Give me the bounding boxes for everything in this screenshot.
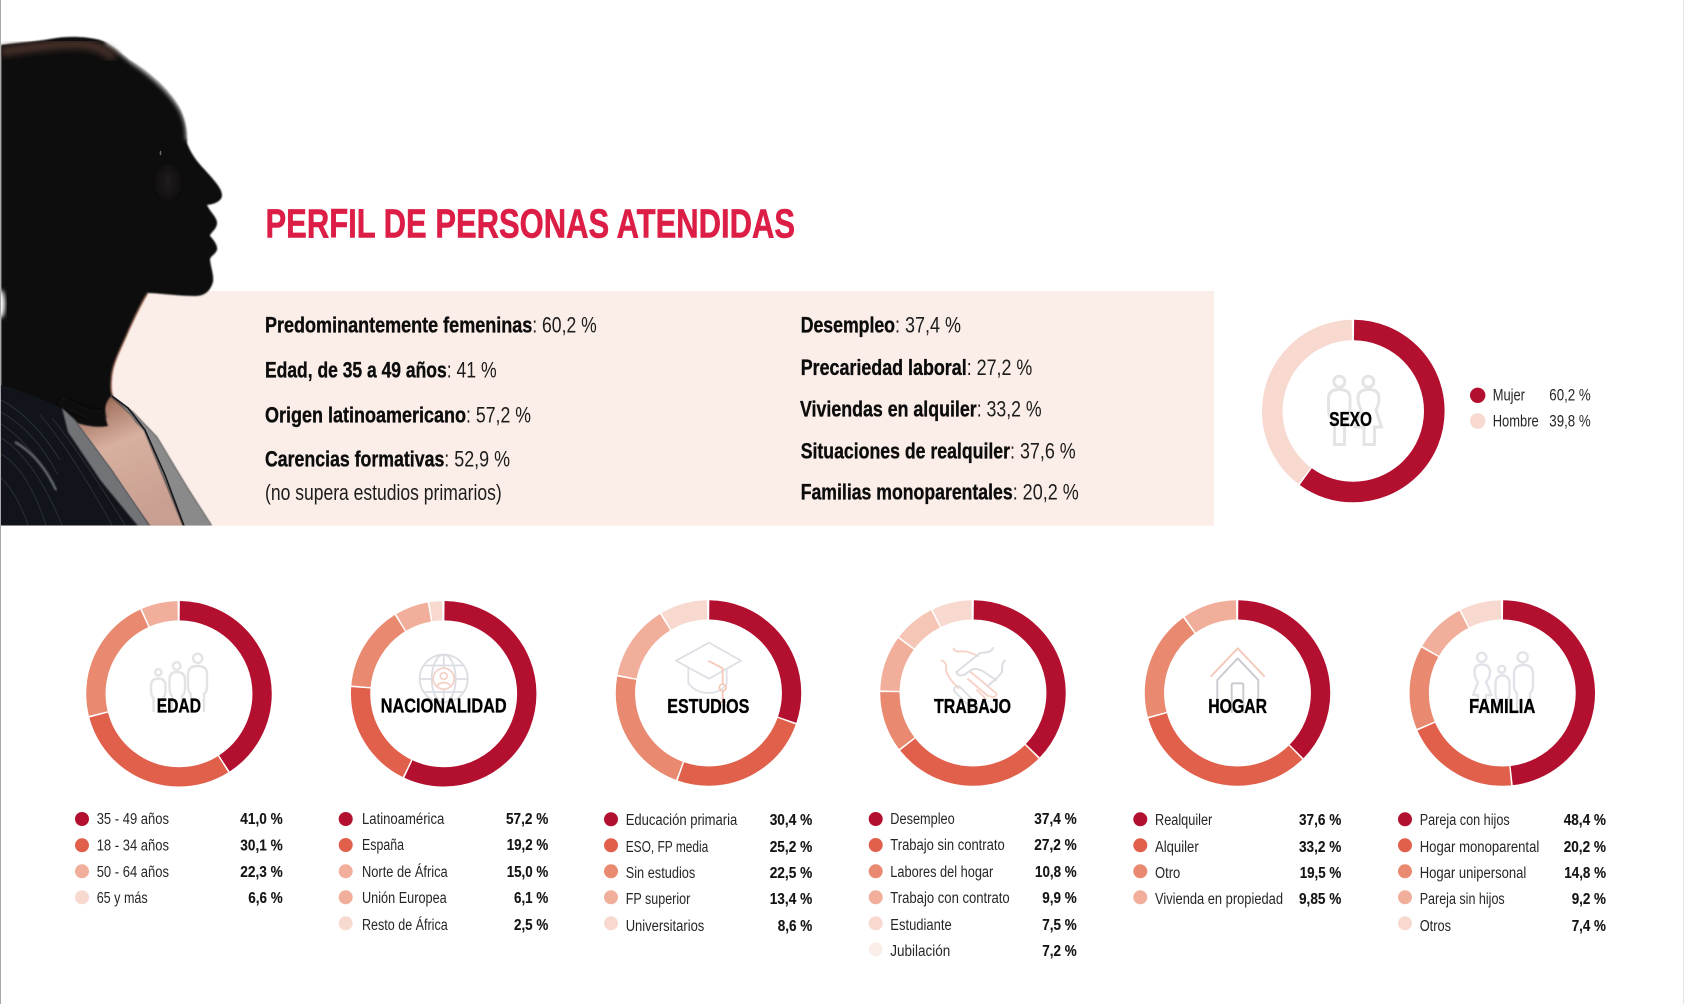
legend: trabajo: Labores del hogar [890, 864, 993, 881]
legend: estudios: 8,6 % [778, 918, 812, 935]
legend: familia: Otros [1420, 918, 1451, 935]
legend: estudios: Sin estudios [626, 865, 695, 882]
summary line: job precarity: Precariedad laboral [801, 355, 967, 380]
legend: trabajo: 10,8 % [1035, 864, 1077, 881]
legend: trabajo: Trabajo sin contrato [890, 837, 1005, 854]
label: hogar: HOGAR [1208, 695, 1267, 718]
label: familia: FAMILIA [1469, 695, 1535, 718]
icon: three people [151, 654, 207, 712]
legend: familia: Pareja sin hijos [1420, 891, 1505, 908]
summary line: sublet situations: Situaciones de realquiler [801, 439, 1010, 464]
legend: trabajo: 7,2 % [1042, 943, 1077, 960]
panel: summary background [1, 291, 1214, 526]
icon: globe with person [420, 655, 468, 703]
legend: estudios: Universitarios [626, 918, 705, 935]
icon: family [1473, 652, 1533, 713]
legend: nacionalidad: 6,1 % [514, 890, 548, 907]
summary line: predominantly female: Predominantemente femeninas [265, 313, 532, 338]
legend: trabajo: 9,9 % [1042, 890, 1077, 907]
icon: handshake [942, 648, 1005, 709]
legend: nacionalidad: Resto de África [362, 917, 448, 934]
legend: estudios: 25,2 % [770, 839, 812, 856]
legend: hogar: Realquiler [1155, 812, 1212, 829]
label: trabajo: TRABAJO [934, 695, 1011, 718]
panel: hogar [1133, 610, 1341, 908]
summary line: education gaps: : 52,9 % [444, 447, 510, 472]
glow behind neck [0, 290, 5, 318]
legend: edad: 35 - 49 años [97, 811, 169, 828]
soft glow over forehead edge [106, 42, 188, 140]
icon: house [1211, 648, 1265, 713]
legend: familia: 9,2 % [1572, 891, 1606, 908]
summary line: unemployment: Desempleo [801, 313, 895, 338]
legend: edad: 41,0 % [240, 811, 283, 828]
legend: familia: Hogar monoparental [1420, 839, 1539, 856]
legend: nacionalidad: 19,2 % [507, 837, 548, 854]
label: sexo: SEXO [1329, 408, 1372, 431]
summary line: age: : 41 % [447, 358, 497, 383]
summary line: predominantly female: : 60,2 % [532, 313, 597, 338]
label: nacionalidad: NACIONALIDAD [381, 695, 507, 718]
legend: hogar: 33,2 % [1299, 839, 1341, 856]
legend: hogar: 37,6 % [1299, 812, 1341, 829]
summary line: rented housing: : 33,2 % [977, 397, 1042, 422]
text block: summary right column [800, 313, 1079, 504]
panel: edad [75, 611, 283, 907]
legend: nacionalidad: Unión Europea [362, 890, 447, 907]
legend: edad: 22,3 % [240, 864, 283, 881]
legend: hogar: 19,5 % [1300, 865, 1341, 882]
legend: familia: 48,4 % [1564, 812, 1606, 829]
summary line: sublet situations: : 37,6 % [1010, 439, 1076, 464]
legend: hogar: 9,85 % [1299, 891, 1341, 908]
donut chart: estudios [625, 610, 792, 776]
legend: estudios: 13,4 % [770, 891, 812, 908]
icon: graduation cap [676, 643, 741, 702]
legend: nacionalidad: España [362, 837, 404, 854]
donut chart: hogar [1154, 610, 1321, 776]
legend: hogar: Alquiler [1155, 839, 1199, 856]
legend: nacionalidad: 15,0 % [507, 864, 548, 881]
panel: nacionalidad [339, 611, 548, 934]
label: estudios: ESTUDIOS [667, 695, 749, 718]
legend: sexo: 60,2 % [1549, 386, 1591, 404]
hair highlight [1, 44, 114, 58]
summary line: age: Edad, de 35 a 49 años [265, 358, 447, 383]
legend: nacionalidad [339, 811, 548, 934]
legend: trabajo: 27,2 % [1034, 837, 1077, 854]
legend: estudios: 30,4 % [770, 812, 812, 829]
legend: hogar: Otro [1155, 865, 1180, 882]
legend: trabajo: Jubilación [890, 943, 950, 960]
legend: trabajo: Desempleo [890, 811, 955, 828]
left lapel [62, 408, 150, 526]
chest skin [74, 396, 183, 526]
summary line: single-parent families: : 20,2 % [1013, 479, 1079, 504]
summary line: education gaps [265, 447, 510, 505]
legend: edad: 65 y más [97, 890, 148, 907]
legend: trabajo: 37,4 % [1034, 811, 1077, 828]
legend: sexo [1470, 386, 1591, 430]
legend: edad: 6,6 % [248, 890, 283, 907]
legend: edad [75, 811, 283, 907]
donut chart: nacionalidad [361, 611, 527, 777]
panel: sexo [1272, 330, 1591, 492]
legend: hogar [1133, 812, 1341, 908]
legend: edad: 50 - 64 años [97, 864, 169, 881]
text block: summary left column [265, 313, 597, 505]
legend: familia: 20,2 % [1564, 839, 1606, 856]
summary line: unemployment: : 37,4 % [895, 313, 961, 338]
summary line: education gaps: Carencias formativas [265, 447, 444, 472]
legend: familia: 14,8 % [1564, 865, 1606, 882]
summary line: origin: Origen latinoamericano [265, 403, 466, 428]
label: edad: EDAD [157, 695, 201, 718]
donut chart: familia [1419, 610, 1585, 776]
legend: trabajo: 7,5 % [1042, 917, 1077, 934]
summary line: rented housing: Viviendas en alquiler [800, 397, 977, 422]
summary line: job precarity: : 27,2 % [967, 355, 1032, 380]
icon: man and woman [1328, 376, 1382, 444]
panel: trabajo [869, 610, 1077, 960]
legend: trabajo: Trabajo con contrato [890, 890, 1010, 907]
eye glint [160, 151, 161, 155]
donut chart: edad [96, 611, 262, 777]
legend: estudios: FP superior [626, 891, 690, 908]
legend: hogar: Vivienda en propiedad [1155, 891, 1283, 908]
legend: estudios: ESO, FP media [626, 839, 709, 856]
legend: familia: Hogar unipersonal [1420, 865, 1526, 882]
legend: familia: 7,4 % [1572, 918, 1606, 935]
summary line: education gaps: (no supera estudios primarios) [265, 480, 502, 505]
donut chart: sexo [1272, 330, 1434, 492]
legend: sexo: 39,8 % [1549, 412, 1591, 430]
legend: nacionalidad: 57,2 % [506, 811, 548, 828]
legend: estudios [604, 812, 812, 935]
legend: nacionalidad: 2,5 % [514, 917, 548, 934]
summary line: origin: : 57,2 % [466, 403, 531, 428]
panel: familia [1398, 610, 1606, 935]
image: woman silhouette in profile [0, 37, 222, 526]
legend: nacionalidad: Norte de África [362, 864, 448, 881]
legend: edad: 18 - 34 años [97, 838, 169, 855]
legend: estudios: 22,5 % [770, 865, 812, 882]
right lapel [112, 396, 212, 526]
legend: nacionalidad: Latinoamérica [362, 811, 445, 828]
legend: estudios: Educación primaria [626, 812, 738, 829]
legend: trabajo: Estudiante [890, 917, 952, 934]
summary line: single-parent families: Familias monoparentales [801, 479, 1013, 504]
neck shadow over skin [104, 410, 108, 418]
legend: familia: Pareja con hijos [1420, 812, 1510, 829]
shirt left [1, 385, 150, 526]
legend: edad: 30,1 % [240, 838, 283, 855]
donut chart: trabajo [890, 610, 1056, 776]
legend: sexo: Hombre [1493, 412, 1539, 430]
cheek light [160, 167, 176, 197]
title: PERFIL DE PERSONAS ATENDIDAS [266, 201, 795, 247]
legend: familia [1398, 812, 1606, 935]
legend: trabajo [869, 811, 1077, 960]
legend: sexo: Mujer [1493, 386, 1525, 404]
panel: estudios [604, 610, 812, 935]
